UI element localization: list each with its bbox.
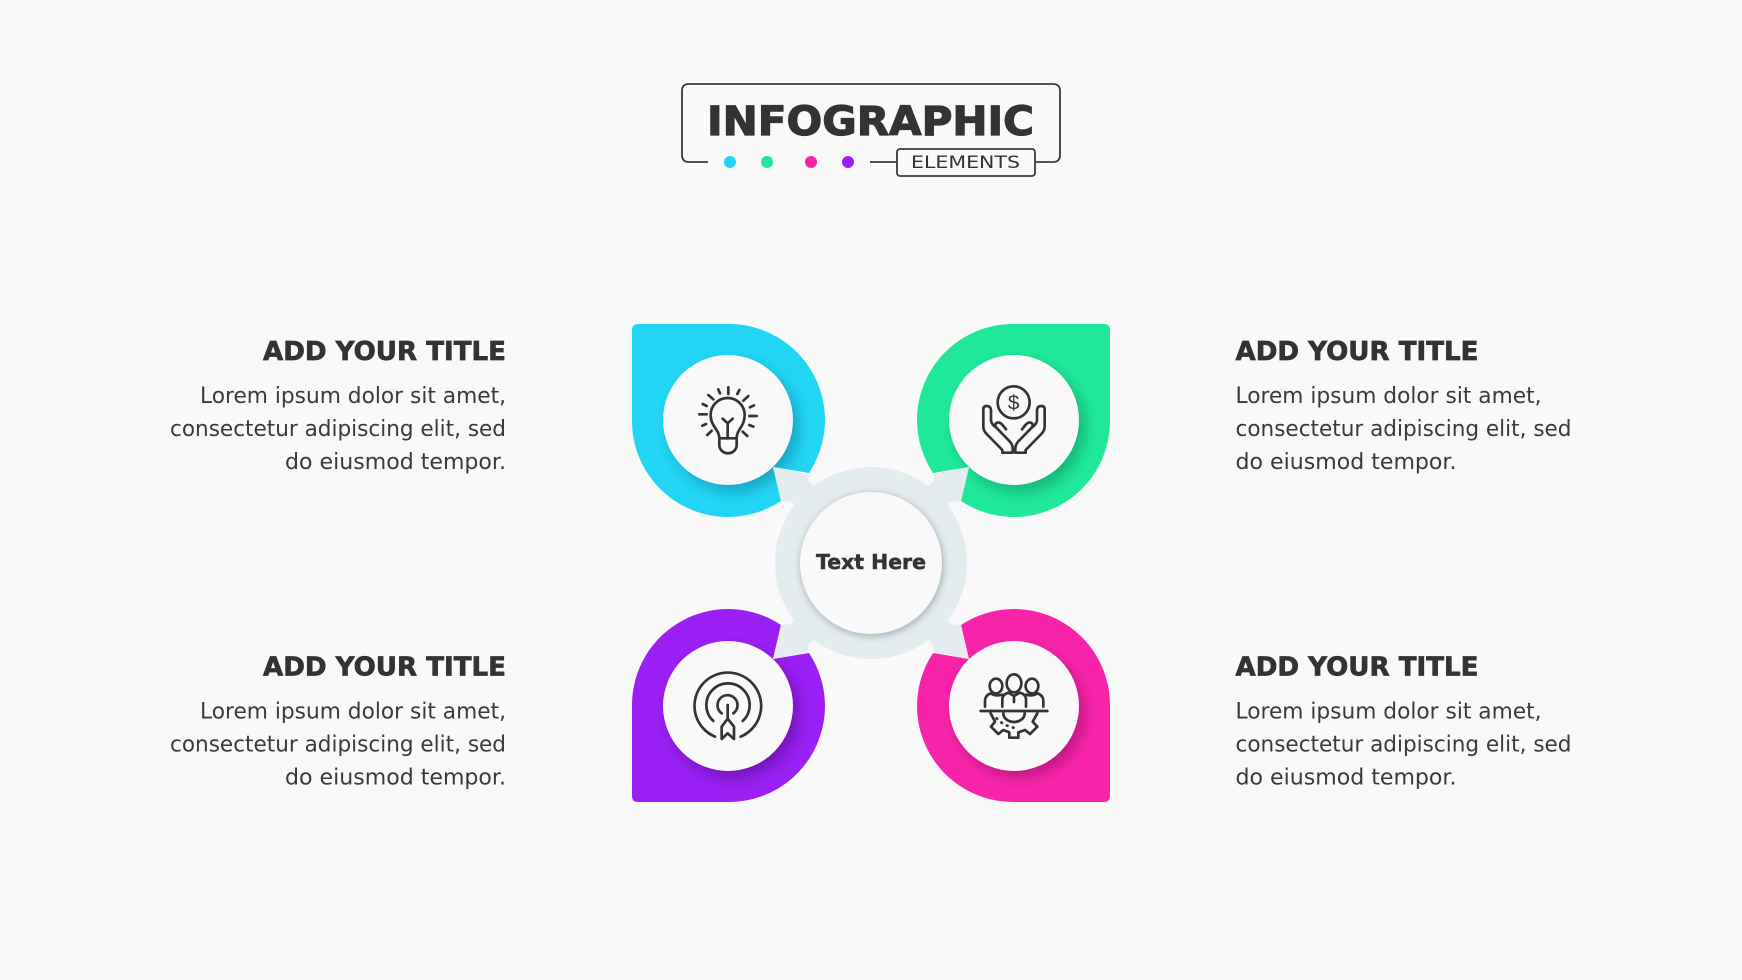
text block: bottom left: Lorem ipsum dolor sit amet, xyxy=(200,700,506,724)
text block: bottom right: consectetur adipiscing elit, sed xyxy=(1236,732,1572,758)
icon: light bulb xyxy=(699,387,757,453)
text block: bottom left: ADD YOUR TITLE xyxy=(263,652,506,682)
title text: INFOGRAPHIC xyxy=(707,99,1034,145)
text block: top right: do eiusmod tempor. xyxy=(1236,450,1456,475)
text block: bottom left xyxy=(170,652,506,790)
teardrop: pink, bottom right xyxy=(917,609,1110,802)
text block: top left: ADD YOUR TITLE xyxy=(263,337,506,367)
teardrop: blue, top left xyxy=(632,324,825,517)
hub label: Text Here xyxy=(816,550,926,574)
icon: hands holding coin: $ xyxy=(1008,392,1020,415)
text block: top left: Lorem ipsum dolor sit amet, xyxy=(200,384,506,409)
text block: bottom right xyxy=(1236,652,1572,790)
central hub with arrows xyxy=(773,467,969,659)
icon: target with arrow xyxy=(694,673,761,739)
text block: bottom right: do eiusmod tempor. xyxy=(1236,766,1456,790)
text block: top right: ADD YOUR TITLE xyxy=(1236,337,1478,367)
hub arrows xyxy=(773,467,969,659)
hub shadow xyxy=(800,493,944,637)
header: infographic title badge xyxy=(682,84,1060,176)
teardrop: purple, bottom left xyxy=(632,609,825,802)
text block: top left: consectetur adipiscing elit, sed xyxy=(170,417,506,442)
hub ring xyxy=(775,467,967,659)
teardrop: green, top right xyxy=(917,324,1110,517)
subtitle badge: ELEMENTS xyxy=(911,153,1020,172)
text block: top right xyxy=(1236,337,1572,475)
text block: top left xyxy=(170,337,506,475)
text block: top right: Lorem ipsum dolor sit amet, xyxy=(1236,384,1542,409)
text block: top left: do eiusmod tempor. xyxy=(285,450,506,475)
title frame xyxy=(682,84,1060,162)
text block: bottom left: do eiusmod tempor. xyxy=(285,766,506,790)
hub centre disc xyxy=(800,492,942,634)
subtitle badge xyxy=(897,149,1035,176)
icon: hands holding coin xyxy=(983,386,1045,453)
text block: bottom left: consectetur adipiscing elit, sed xyxy=(170,732,506,758)
icon: team with gear xyxy=(981,674,1047,738)
text block: bottom right: Lorem ipsum dolor sit amet, xyxy=(1236,700,1542,724)
colour dots xyxy=(724,156,854,168)
text block: top right: consectetur adipiscing elit, sed xyxy=(1236,417,1572,442)
text block: bottom right: ADD YOUR TITLE xyxy=(1236,652,1478,682)
